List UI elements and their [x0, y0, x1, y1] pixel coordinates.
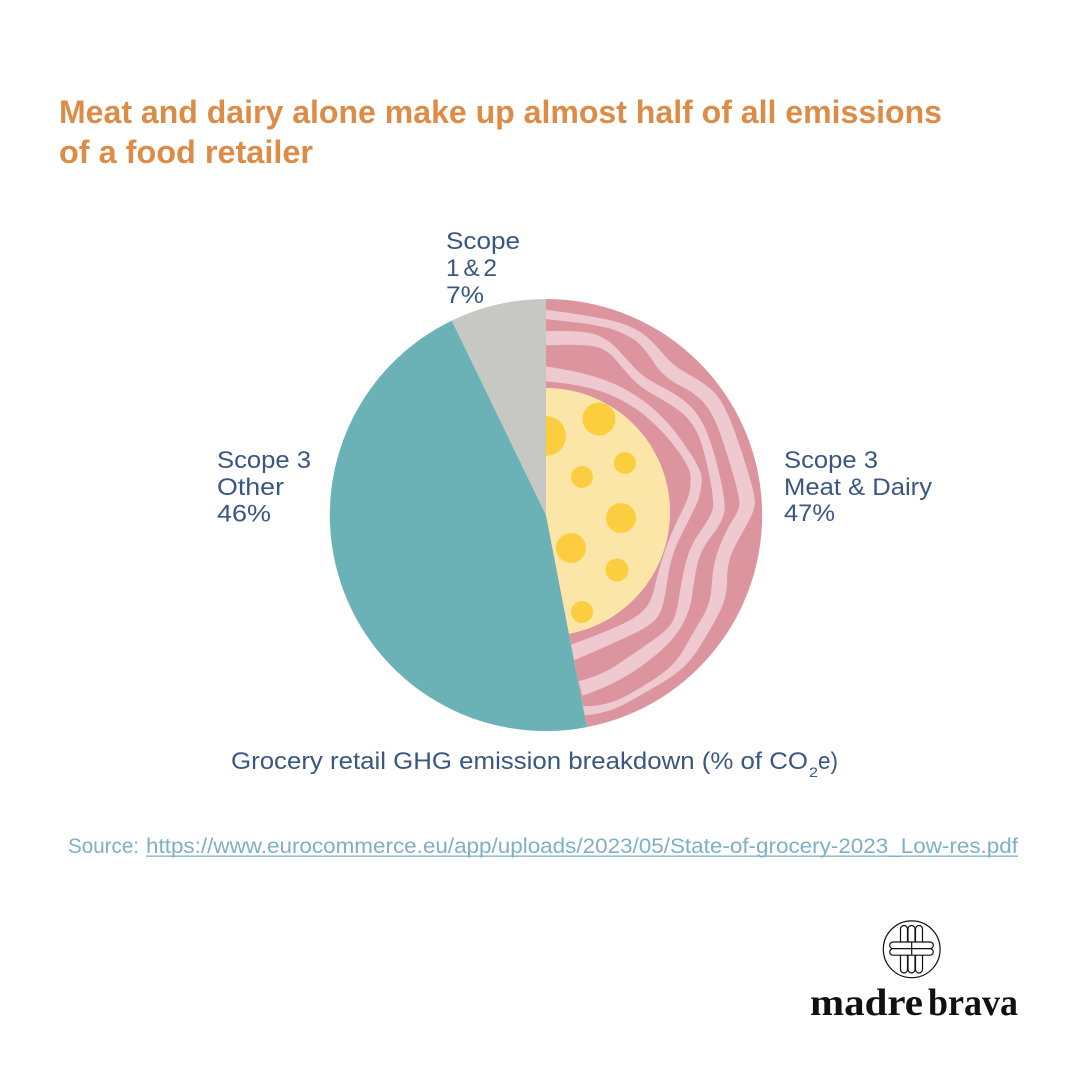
chart caption: 2 — [809, 764, 818, 780]
logo wordmark: brava — [928, 982, 1018, 1024]
label: Scope 3 Meat and Dairy: 47% — [784, 500, 835, 527]
label: Scope 1 and 2: Scope — [446, 228, 520, 255]
label: Scope 3 Other: Other — [217, 474, 284, 501]
chart caption: e) — [818, 748, 838, 775]
label: Scope 3 Other: Scope 3 — [217, 447, 311, 474]
title: of a food retailer — [59, 134, 313, 170]
slice: Scope 3 Other — [330, 321, 587, 731]
pie chart — [330, 290, 770, 740]
title: Meat and dairy alone make up almost half of all emissions — [59, 94, 942, 130]
label: Scope 1 and 2: 7% — [446, 282, 484, 309]
source line: Source: — [68, 835, 139, 858]
cheese holes — [546, 402, 636, 623]
label: Scope 3 Other: 46% — [217, 500, 271, 528]
title — [59, 94, 942, 170]
logo: madre brava — [810, 921, 1018, 1024]
label: Scope 3 Other — [217, 447, 311, 528]
slice: Scope 3 Meat and Dairy — [546, 299, 762, 728]
source line: https://www.eurocommerce.eu/app/uploads/2023/05/State-of-grocery-2023_Low-res.pdf — [146, 835, 1018, 858]
logo wordmark — [810, 982, 1018, 1024]
label: Scope 3 Meat and Dairy: Meat & Dairy — [784, 474, 932, 501]
cheese circle — [546, 388, 670, 634]
logo wordmark: madre — [810, 982, 923, 1024]
label: Scope 1 and 2 — [446, 228, 520, 309]
logo emblem — [883, 921, 940, 978]
label: Scope 3 Meat and Dairy — [784, 447, 932, 527]
label: Scope 3 Meat and Dairy: Scope 3 — [784, 447, 878, 474]
chart caption: Grocery retail GHG emission breakdown (% of CO — [231, 748, 808, 775]
meat fat stripes — [543, 310, 754, 715]
label: Scope 1 and 2: 1 & 2 — [446, 255, 497, 282]
slice: Scope 1 and 2 — [452, 299, 546, 515]
